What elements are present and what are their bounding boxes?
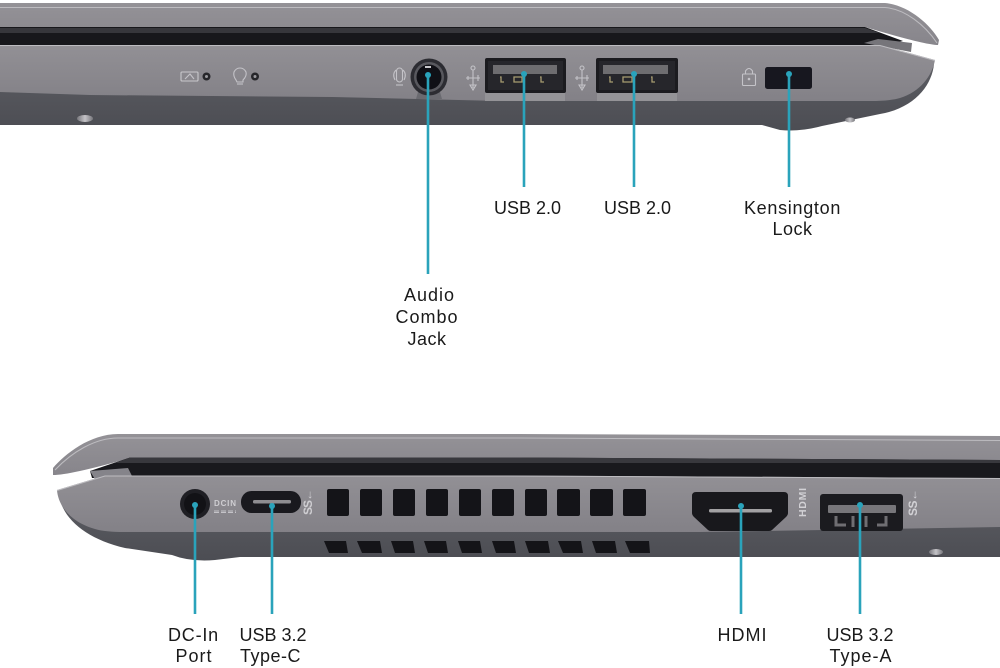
underside: bottom laptop	[60, 500, 1000, 560]
screw	[929, 549, 943, 555]
hinge gap	[0, 27, 903, 46]
laptop: left side view	[53, 434, 1000, 560]
port: usb 2.0 left	[485, 58, 566, 101]
callout: usb 3.2 type-a: Type-A	[829, 646, 893, 666]
callout: dc-in port: Port	[175, 646, 213, 666]
callout: usb 3.2 type-a: USB 3.2	[826, 625, 894, 645]
port: dc-in	[180, 489, 210, 519]
icon: superspeed mark a: SS←	[906, 489, 920, 516]
callout: hdmi	[718, 503, 768, 645]
icon: hdmi mark: HDMI	[797, 488, 809, 517]
callout: usb 2.0 right: USB 2.0	[604, 198, 671, 218]
callout: dc-in port	[168, 502, 219, 666]
port: hdmi	[692, 492, 788, 531]
icon: dc-in label	[214, 499, 236, 512]
port: usb-c	[241, 491, 301, 513]
vents: lower row	[324, 541, 650, 553]
icon: power indicator	[234, 68, 259, 84]
callout: usb 2.0 right	[604, 71, 671, 218]
callout: usb 3.2 type-c: Type-C	[240, 646, 301, 666]
callout: audio combo jack: Combo	[395, 307, 459, 327]
icon: headset	[394, 68, 405, 85]
port: usb 3.2 type-a	[820, 494, 903, 531]
callout: kensington lock: Lock	[772, 219, 813, 239]
icon: superspeed mark c: SS←	[301, 489, 315, 515]
callout: usb 3.2 type-a	[826, 502, 894, 666]
callout: kensington lock	[744, 71, 841, 239]
vents: upper row	[327, 489, 646, 516]
callout: kensington lock: Kensington	[744, 198, 841, 218]
screws	[77, 115, 93, 122]
icon: padlock	[742, 68, 756, 86]
callout: audio combo jack	[395, 72, 459, 349]
icon: dc-in label: DCIN	[214, 499, 236, 508]
callout: usb 3.2 type-c: USB 3.2	[239, 625, 307, 645]
callout: audio combo jack: Audio	[404, 285, 455, 305]
port: audio jack	[410, 58, 448, 99]
port: usb 2.0 right	[596, 58, 678, 101]
callout: usb 3.2 type-c	[239, 503, 307, 666]
underside: top laptop	[0, 64, 934, 130]
icon: usb symbol 2	[575, 66, 589, 90]
callout: audio combo jack: Jack	[407, 329, 447, 349]
port: kensington lock	[765, 67, 812, 89]
front face: top laptop	[0, 45, 935, 101]
front face: bottom laptop	[57, 476, 1000, 532]
hinge gap	[90, 458, 1000, 478]
laptop: right side view	[0, 3, 939, 130]
lid: top laptop	[0, 3, 939, 45]
callout: dc-in port: DC-In	[168, 625, 219, 645]
callout: usb 2.0 left	[494, 71, 561, 218]
callout: hdmi: HDMI	[718, 625, 768, 645]
icon: usb symbol 1	[466, 66, 480, 90]
callout: usb 2.0 left: USB 2.0	[494, 198, 561, 218]
lid: bottom laptop	[53, 434, 1000, 475]
icon: battery indicator	[181, 72, 210, 81]
